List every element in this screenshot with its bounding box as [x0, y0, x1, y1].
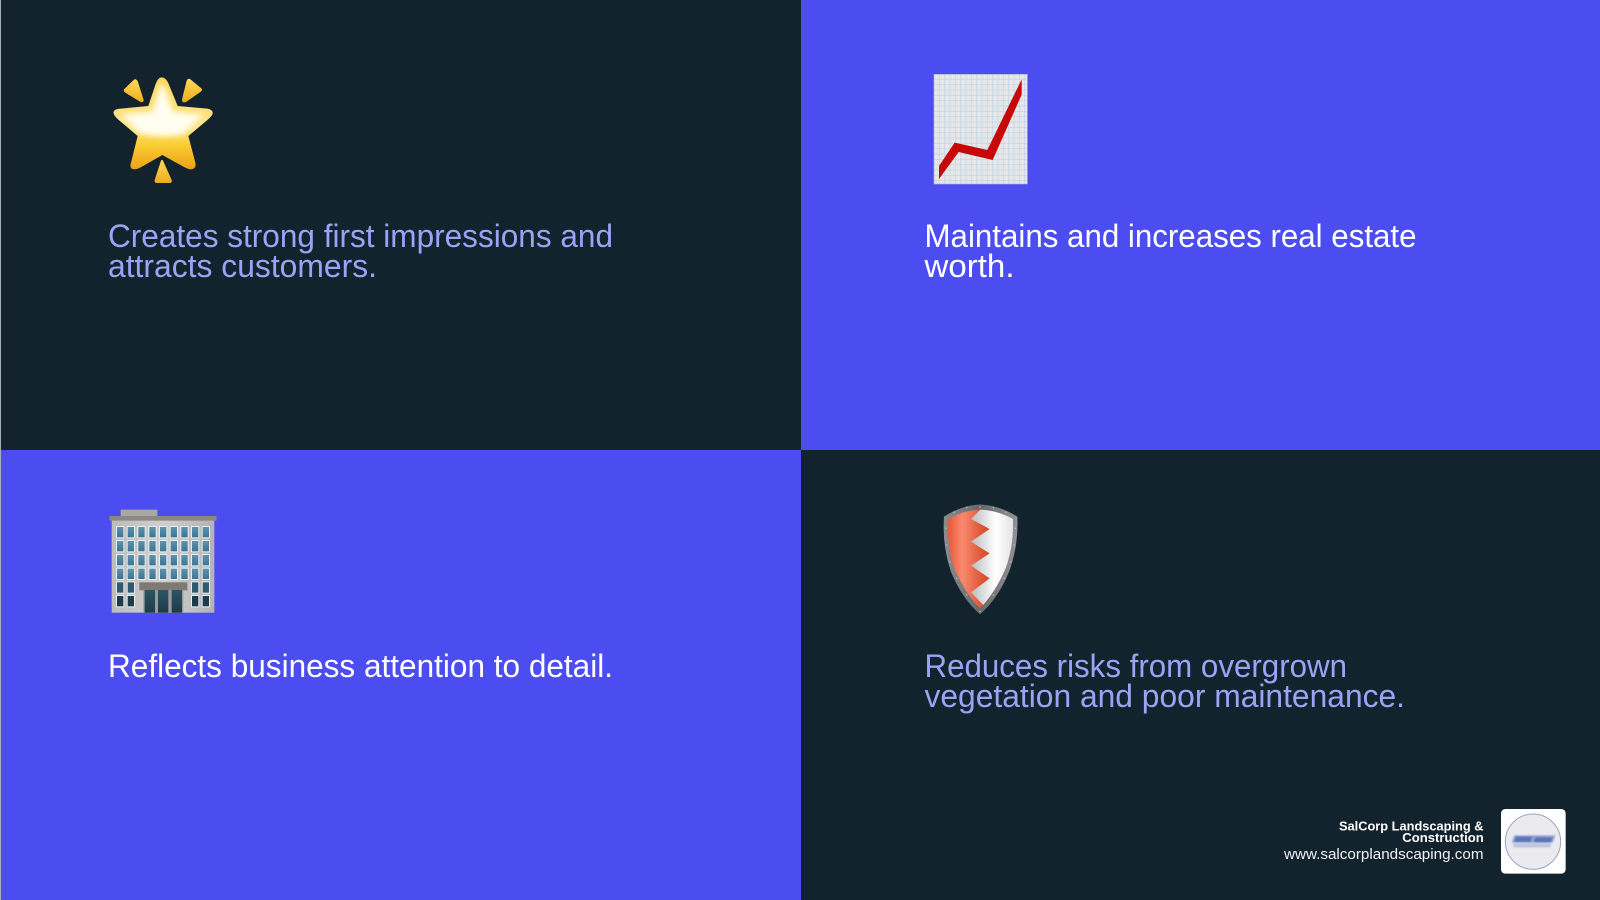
left edge line [0, 0, 1, 900]
text: real estate worth: Maintains and increases real estate [924, 218, 1416, 254]
text: first impressions [108, 218, 613, 284]
footer brand [1283, 809, 1566, 874]
text: first impressions: Creates strong first impressions and [108, 218, 613, 254]
brand name and website [1283, 818, 1484, 863]
icon: office building [109, 510, 217, 613]
panel: reduces risks [924, 504, 1566, 874]
text: reduces risks: Reduces risks from overgrown [924, 648, 1347, 684]
text: real estate worth: worth. [923, 248, 1014, 284]
brand name and website: SalCorp Landscaping & [1339, 818, 1484, 834]
text: first impressions: attracts customers. [108, 248, 377, 284]
text: real estate worth [923, 218, 1416, 284]
logo badge [1501, 809, 1566, 874]
text: reduces risks: vegetation and poor maintenance. [924, 678, 1405, 714]
icon: chart increasing [934, 74, 1027, 184]
brand name and website: www.salcorplandscaping.com [1283, 846, 1484, 863]
panel: first impressions [109, 77, 611, 278]
panel: attention to detail [0, 450, 801, 900]
icon: shield [944, 504, 1020, 614]
text: attention to detail: Reflects business attention to detail. [108, 648, 613, 684]
text: reduces risks [924, 648, 1405, 714]
panel: real estate worth [801, 0, 1600, 450]
brand name and website: Construction [1402, 830, 1484, 845]
icon: glowing star [114, 77, 213, 183]
